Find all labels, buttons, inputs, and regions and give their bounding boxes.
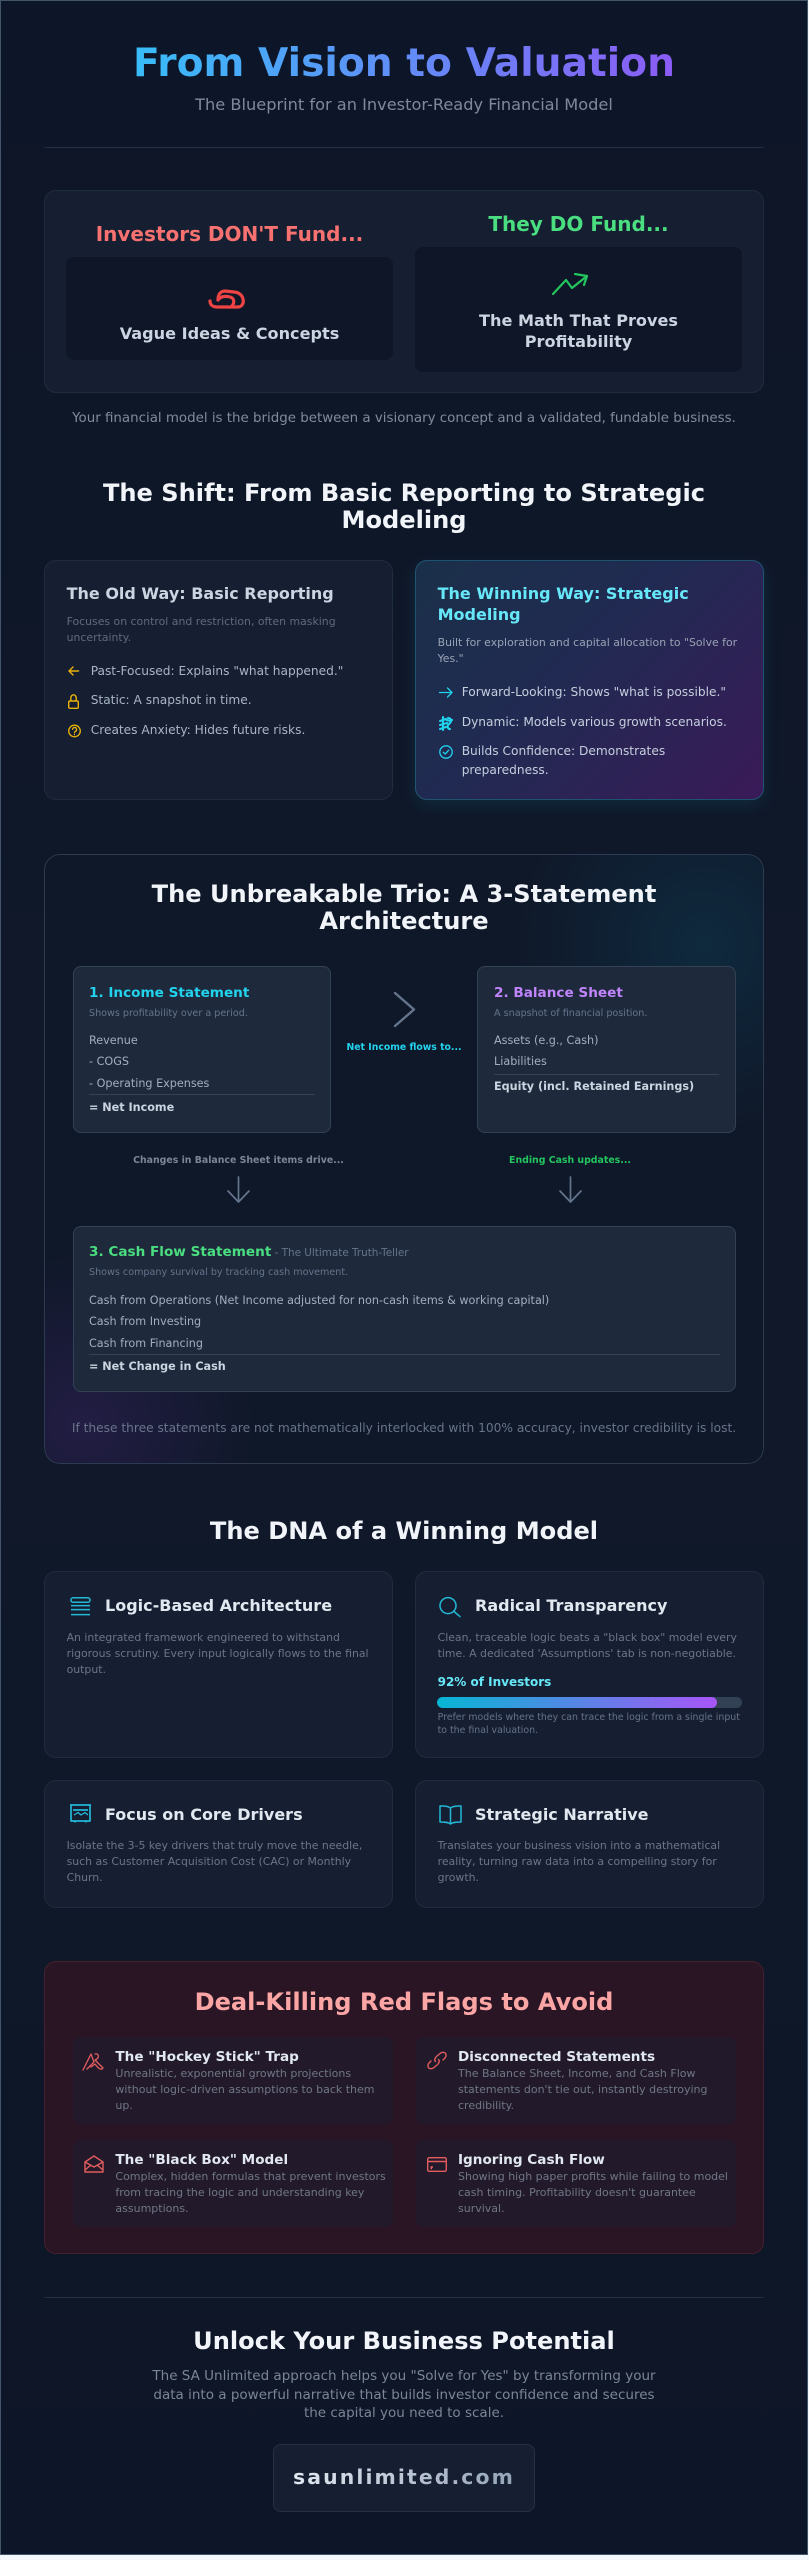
icon: lock — [68, 694, 79, 709]
description — [115, 2169, 386, 2217]
title: Disconnected Statements — [458, 2049, 655, 2065]
description: Translates your business vision into a mathematical — [438, 1839, 720, 1852]
description: Isolate the 3-5 key drivers that truly move the needle, — [67, 1839, 362, 1852]
description: Yes." — [438, 652, 464, 665]
arrow: chevron — [394, 992, 416, 1028]
line items — [89, 1294, 549, 1350]
icon: open envelope — [84, 2155, 104, 2173]
description: growth. — [438, 1871, 479, 1884]
subtitle: A snapshot of financial position. — [494, 1008, 647, 1019]
description: Clean, traceable logic beats a "black box" model every — [438, 1631, 737, 1644]
description — [458, 2169, 728, 2217]
heading: DNA: The DNA of a Winning Model — [210, 1517, 598, 1545]
line items — [89, 1034, 209, 1090]
line items: Liabilities — [494, 1055, 547, 1068]
list item: confidence: Builds Confidence: Demonstrates — [462, 744, 665, 758]
heading: they do fund: They DO Fund... — [488, 212, 669, 236]
list item: dynamic: Dynamic: Models various growth scenarios. — [462, 715, 727, 729]
label: Net Income flows to... — [346, 1042, 462, 1053]
stat note: Prefer models where they can trace the logic from a single input — [438, 1712, 740, 1722]
warning statement: If these three statements are not mathematically interlocked with 100% accuracy, investor credibility is lost. — [72, 1421, 736, 1435]
description: rigorous scrutiny. Every input logically flows to the final — [67, 1647, 369, 1660]
heading: the shift: The Shift: From Basic Reporting to Strategic — [103, 479, 705, 507]
icon: arrow left — [68, 666, 80, 676]
description: reality, turning raw data into a compelling story for — [438, 1855, 717, 1868]
description — [438, 636, 738, 665]
icon: chain link — [427, 2051, 447, 2070]
call to action text: the capital you need to scale. — [304, 2405, 504, 2421]
bridge statement: Your financial model is the bridge between a visionary concept and a validated, fundable business. — [72, 411, 736, 426]
list item: confidence — [439, 744, 665, 777]
description: The Balance Sheet, Income, and Cash Flow — [458, 2067, 696, 2080]
icon: question — [68, 724, 81, 738]
description: Churn. — [67, 1871, 103, 1884]
description: Focuses on control and restriction, often masking — [67, 615, 336, 628]
heading: trio — [152, 880, 656, 935]
heading: the shift — [103, 479, 705, 534]
heading: Logic-Based Architecture — [105, 1596, 332, 1615]
heading: investors don't fund: Investors DON'T Fund... — [96, 222, 363, 246]
description: such as Customer Acquisition Cost (CAC) or Monthly — [67, 1855, 351, 1868]
heading: the shift: Modeling — [341, 506, 467, 534]
label: vague ideas: Vague Ideas & Concepts — [120, 324, 339, 343]
flag: disconnected statements — [416, 2037, 736, 2124]
description: without logic-driven assumptions to back them — [115, 2083, 375, 2096]
icon: stacked layers — [70, 1597, 91, 1616]
description — [66, 1631, 369, 1676]
heading: winning way — [438, 584, 689, 624]
total: = Net Income — [89, 1101, 174, 1114]
line items: Revenue — [89, 1034, 138, 1047]
website badge — [273, 2444, 535, 2512]
heading: trio: Architecture — [319, 907, 489, 935]
connector: ending cash updates — [509, 1155, 631, 1203]
label: the math: Profitability — [525, 332, 632, 351]
heading: winning way: Modeling — [438, 604, 521, 624]
line items: - Operating Expenses — [89, 1077, 209, 1090]
label: Changes in Balance Sheet items drive... — [133, 1155, 344, 1166]
panel: winning way — [415, 560, 764, 800]
subtitle: Shows company survival by tracking cash movement. — [89, 1267, 348, 1278]
description: credibility. — [458, 2099, 514, 2112]
description: An integrated framework engineered to withstand — [67, 1631, 340, 1644]
title: The "Hockey Stick" Trap — [115, 2049, 299, 2065]
card: strategic narrative — [415, 1780, 764, 1908]
description: Complex, hidden formulas that prevent investors — [115, 2170, 386, 2183]
line items: Cash from Investing — [89, 1315, 201, 1328]
panel: old way — [44, 560, 393, 800]
description: Showing high paper profits while failing to model — [458, 2170, 728, 2183]
arrow: down — [559, 1176, 582, 1203]
description: cash timing. Profitability doesn't guarantee — [458, 2186, 696, 2199]
description: survival. — [458, 2202, 505, 2215]
line items: Cash from Financing — [89, 1337, 203, 1350]
icon: drivers — [70, 1804, 91, 1822]
heading: call to action: Unlock Your Business Potential — [193, 2327, 615, 2355]
card: focus on core drivers — [44, 1780, 393, 1908]
stat note — [438, 1712, 740, 1736]
subtitle: The Blueprint for an Investor-Ready Financial Model — [195, 95, 613, 114]
title: 1. Income Statement — [89, 985, 249, 1001]
box: balance sheet — [477, 966, 736, 1133]
panel: what investors fund — [44, 190, 764, 393]
card: logic-based architecture — [44, 1571, 393, 1758]
icon: cloud — [208, 289, 245, 309]
flag: ignoring cash flow — [416, 2140, 736, 2227]
list item: past-focused: Past-Focused: Explains "what happened." — [91, 664, 343, 678]
progress bar: 92% — [437, 1697, 742, 1708]
connector: net income flow — [346, 992, 462, 1053]
card: radical transparency — [415, 1571, 764, 1758]
description — [67, 615, 336, 644]
icon: dynamic — [439, 716, 453, 731]
description: assumptions. — [115, 2202, 189, 2215]
icon: open book — [439, 1805, 462, 1825]
heading: Strategic Narrative — [475, 1805, 649, 1824]
description — [438, 1631, 737, 1660]
description: Built for exploration and capital allocation to "Solve for — [438, 636, 737, 649]
line items: Cash from Operations (Net Income adjusted for non-cash items & working capital) — [89, 1294, 549, 1307]
subtitle: Shows profitability over a period. — [89, 1008, 248, 1019]
box: vague ideas — [66, 257, 393, 360]
heading: old way: The Old Way: Basic Reporting — [67, 584, 334, 602]
description: Unrealistic, exponential growth projections — [115, 2067, 351, 2080]
arrow: down — [227, 1176, 250, 1203]
icon: trend up — [552, 272, 588, 296]
description: from tracing the logic and understanding key — [115, 2186, 364, 2199]
list item: static: Static: A snapshot in time. — [91, 693, 252, 707]
total: = Net Change in Cash — [89, 1360, 226, 1373]
title: 3. Cash Flow Statement - The Ultimate Truth-Teller — [89, 1244, 409, 1260]
list item: confidence: preparedness. — [462, 763, 549, 777]
icon: magnifier — [439, 1596, 461, 1618]
list item: forward-looking: Forward-Looking: Shows "what is possible." — [462, 685, 726, 699]
box: income statement — [73, 966, 331, 1133]
description — [67, 1839, 362, 1884]
description: time. A dedicated 'Assumptions' tab is non-negotiable. — [438, 1647, 736, 1660]
description — [115, 2066, 375, 2114]
website badge: saunlimited.com — [293, 2465, 515, 2489]
header — [44, 41, 764, 148]
line items: Assets (e.g., Cash) — [494, 1034, 598, 1047]
total: Equity (incl. Retained Earnings) — [494, 1080, 694, 1093]
description — [458, 2066, 708, 2114]
stat note: to the final valuation. — [438, 1725, 538, 1736]
description: statements don't tie out, instantly destroying — [458, 2083, 708, 2096]
line items: - COGS — [89, 1055, 129, 1068]
title: Ignoring Cash Flow — [458, 2152, 605, 2168]
panel: unbreakable trio — [44, 854, 764, 1464]
heading: red flags: Deal-Killing Red Flags to Avoid — [195, 1988, 613, 2016]
title: From Vision to Valuation — [133, 41, 675, 86]
icon: arrow right — [438, 687, 453, 698]
flag: black box — [73, 2140, 393, 2227]
heading: Radical Transparency — [475, 1596, 667, 1615]
list item: anxiety: Creates Anxiety: Hides future risks. — [91, 723, 305, 737]
icon: hockey sticks — [82, 2053, 104, 2071]
flag: hockey stick — [73, 2037, 393, 2124]
description: output. — [67, 1663, 106, 1676]
call to action text — [44, 2367, 764, 2423]
description: up. — [115, 2099, 133, 2112]
label: the math — [479, 311, 678, 351]
title: 2. Balance Sheet — [494, 985, 623, 1001]
heading: Focus on Core Drivers — [105, 1805, 303, 1824]
icon: check circle — [439, 745, 453, 759]
icon: credit card — [427, 2157, 447, 2172]
heading: winning way: The Winning Way: Strategic — [438, 584, 689, 602]
call to action text: The SA Unlimited approach helps you "Solve for Yes" by transforming your — [152, 2368, 656, 2384]
description — [438, 1838, 720, 1886]
panel: red flags — [44, 1961, 764, 2254]
stat label: 92% of Investors — [438, 1675, 551, 1689]
label: Ending Cash updates... — [509, 1155, 631, 1166]
call to action text: data into a powerful narrative that builds investor confidence and secures — [153, 2387, 655, 2403]
heading: trio: The Unbreakable Trio: A 3-Statement — [152, 880, 656, 908]
box: the math — [415, 247, 742, 372]
box: cash flow statement — [73, 1226, 736, 1392]
title: The "Black Box" Model — [115, 2152, 288, 2168]
line items — [494, 1034, 598, 1068]
connector: balance sheet drives cash flow — [133, 1155, 344, 1203]
description: uncertainty. — [67, 631, 131, 644]
label: the math: The Math That Proves — [479, 311, 678, 330]
